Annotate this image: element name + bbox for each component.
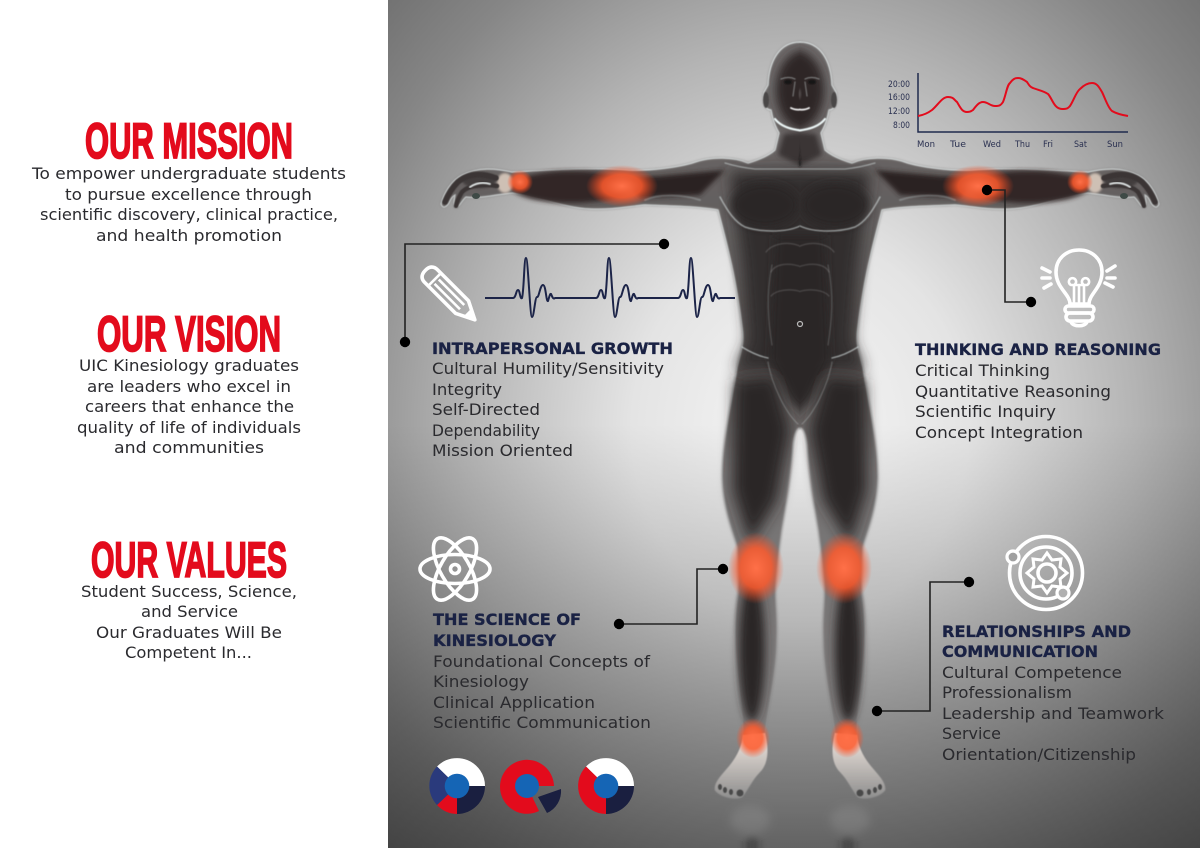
heading and list: the science of kinesiology: THE SCIENCE OF bbox=[433, 610, 581, 629]
heading and list: intrapersonal growth bbox=[432, 339, 673, 460]
heading and list: intrapersonal growth: Mission Oriented bbox=[432, 441, 573, 460]
icon: orbit star bbox=[1007, 536, 1082, 610]
text block: values statement: Student Success, Science, bbox=[81, 582, 297, 601]
heading and list: thinking and reasoning: Quantitative Reasoning bbox=[915, 382, 1111, 401]
joint glows bbox=[507, 165, 1093, 758]
donut chart: red with exploded navy slice bbox=[500, 760, 561, 814]
donut chart: white, navy, red, blue bbox=[429, 758, 485, 814]
icon: light bulb bbox=[1042, 250, 1115, 326]
icon: pencil bbox=[419, 264, 482, 327]
heading: our vision: OUR VISION bbox=[97, 306, 281, 362]
text block: mission statement: to pursue excellence through bbox=[65, 185, 312, 204]
heading and list: relationships and communication: Professionalism bbox=[942, 683, 1072, 702]
line chart: weekly curve: Wed bbox=[983, 140, 1001, 150]
heading and list: the science of kinesiology: Scientific Communication bbox=[433, 713, 651, 732]
heading and list: intrapersonal growth: Dependability bbox=[432, 421, 540, 440]
icon: heartbeat line bbox=[485, 258, 735, 317]
line chart: weekly curve: Sun bbox=[1107, 140, 1123, 150]
text block: values statement bbox=[81, 582, 297, 662]
heading and list: intrapersonal growth: Self-Directed bbox=[432, 400, 540, 419]
heading and list: intrapersonal growth: Cultural Humility/Sensitivity bbox=[432, 359, 664, 378]
icon: atom bbox=[420, 531, 490, 607]
heading and list: intrapersonal growth: INTRAPERSONAL GROWTH bbox=[432, 339, 673, 358]
line chart: weekly curve: Sat bbox=[1074, 140, 1088, 150]
foot reflections bbox=[730, 806, 870, 848]
heading and list: relationships and communication: Orientation/Citizenship bbox=[942, 745, 1136, 764]
text block: vision statement bbox=[77, 356, 301, 457]
text block: mission statement: To empower undergraduate students bbox=[31, 164, 346, 183]
heading and list: thinking and reasoning bbox=[915, 340, 1161, 442]
panel: gradient background bbox=[388, 0, 1200, 848]
connector: science of kinesiology bbox=[614, 564, 728, 629]
heading and list: thinking and reasoning: THINKING AND REASONING bbox=[915, 340, 1161, 359]
line chart: weekly curve: Mon bbox=[917, 140, 935, 150]
heading and list: thinking and reasoning: Critical Thinking bbox=[915, 361, 1050, 380]
text block: vision statement: UIC Kinesiology graduates bbox=[79, 356, 299, 375]
connector: thinking and reasoning bbox=[982, 185, 1036, 307]
text block: mission statement: and health promotion bbox=[96, 226, 282, 245]
text block: values statement: and Service bbox=[141, 602, 238, 621]
line chart: weekly curve: 8:00 bbox=[893, 121, 910, 131]
panel: white text column bbox=[0, 0, 388, 848]
text block: vision statement: careers that enhance the bbox=[85, 397, 294, 416]
line chart: weekly curve: Fri bbox=[1043, 140, 1053, 150]
text block: vision statement: and communities bbox=[114, 438, 264, 457]
heading and list: the science of kinesiology: Kinesiology bbox=[433, 672, 529, 691]
heading and list: intrapersonal growth: Integrity bbox=[432, 380, 502, 399]
donut chart: white, navy, red, blue bbox=[578, 758, 634, 814]
heading and list: thinking and reasoning: Concept Integration bbox=[915, 423, 1083, 442]
heading: our values: OUR VALUES bbox=[91, 532, 287, 588]
line chart: weekly curve bbox=[888, 73, 1128, 150]
heading and list: relationships and communication: Cultural Competence bbox=[942, 663, 1122, 682]
heading and list: relationships and communication: COMMUNICATION bbox=[942, 642, 1098, 661]
text block: vision statement: quality of life of individuals bbox=[77, 418, 301, 437]
line chart: weekly curve: Thu bbox=[1014, 140, 1030, 150]
heading and list: relationships and communication: RELATIONSHIPS AND bbox=[942, 622, 1131, 641]
heading and list: relationships and communication: Service bbox=[942, 724, 1001, 743]
connector: relationships and communication bbox=[872, 577, 974, 716]
line chart: weekly curve: 12:00 bbox=[888, 107, 910, 117]
text block: vision statement: are leaders who excel in bbox=[87, 377, 291, 396]
text block: values statement: Competent In... bbox=[125, 643, 252, 662]
line chart: weekly curve: 16:00 bbox=[888, 93, 910, 103]
text block: values statement: Our Graduates Will Be bbox=[96, 623, 282, 642]
heading and list: relationships and communication bbox=[942, 622, 1165, 764]
illustration: human body with highlighted joints bbox=[441, 42, 1159, 848]
text block: mission statement bbox=[31, 164, 346, 245]
heading and list: the science of kinesiology bbox=[433, 610, 651, 732]
connector: intrapersonal growth bbox=[400, 239, 669, 347]
text block: mission statement: scientific discovery, clinical practice, bbox=[40, 205, 338, 224]
heading and list: relationships and communication: Leadership and Teamwork bbox=[942, 704, 1165, 723]
heading: our mission: OUR MISSION bbox=[85, 113, 293, 169]
heading and list: the science of kinesiology: KINESIOLOGY bbox=[433, 631, 556, 650]
line chart: weekly curve: 20:00 bbox=[888, 80, 910, 90]
heading and list: the science of kinesiology: Foundational Concepts of bbox=[433, 652, 650, 671]
heading and list: thinking and reasoning: Scientific Inquiry bbox=[915, 402, 1056, 421]
navel bbox=[798, 322, 802, 326]
line chart: weekly curve: Tue bbox=[949, 140, 966, 150]
heading and list: the science of kinesiology: Clinical Application bbox=[433, 693, 595, 712]
